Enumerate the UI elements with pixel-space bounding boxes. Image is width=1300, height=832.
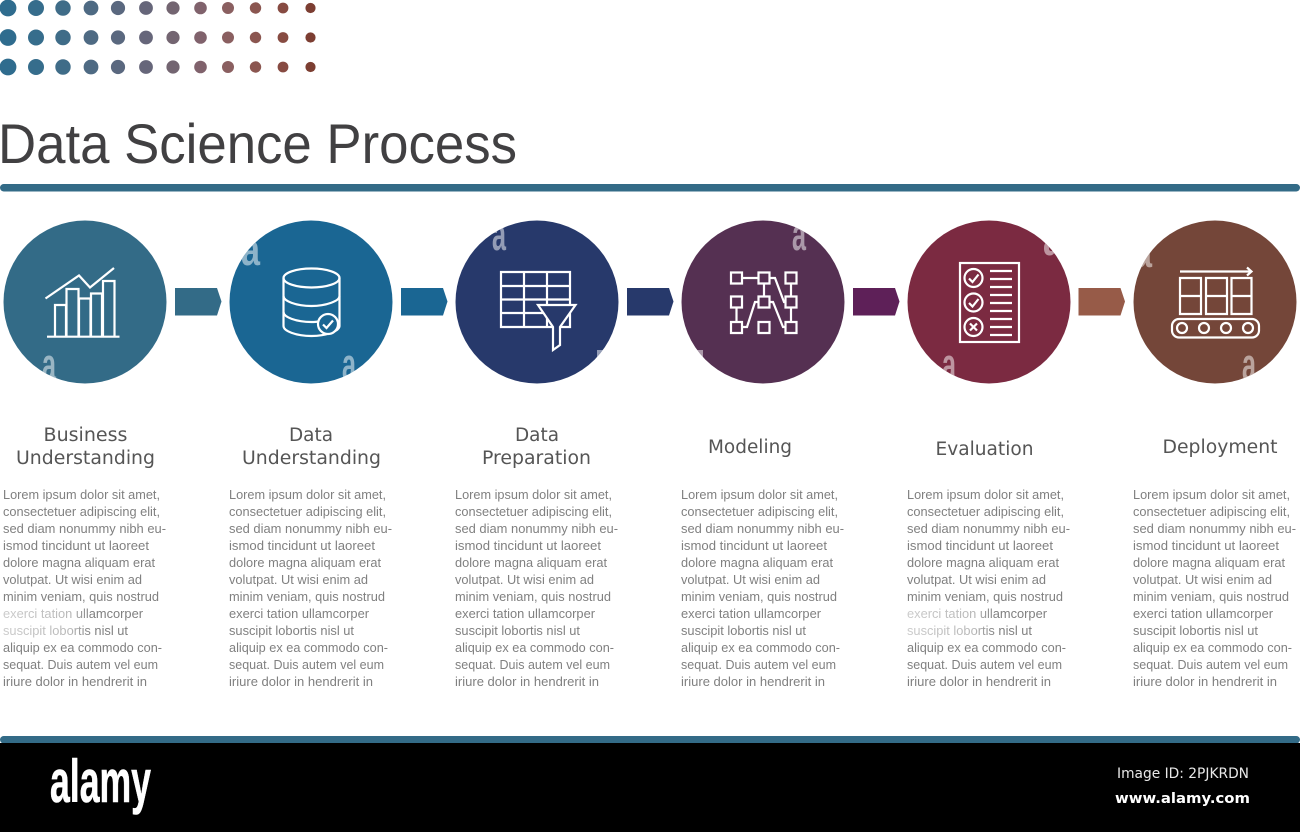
text block: Data Understanding: ismod tincidunt ut laoreet bbox=[229, 538, 375, 553]
text block: Data Understanding: suscipit lobortis nisl ut bbox=[229, 623, 354, 638]
icon: node graph bbox=[731, 272, 796, 333]
text block: Deployment: Lorem ipsum dolor sit amet, bbox=[1133, 487, 1290, 502]
text block: Deployment: exerci tation ullamcorper bbox=[1133, 606, 1274, 621]
text block: Business Understanding bbox=[3, 487, 166, 689]
text block: Deployment: sequat. Duis autem vel eum bbox=[1133, 657, 1288, 672]
text block: Evaluation: consectetuer adipiscing elit, bbox=[907, 504, 1064, 519]
text block: Data Understanding: consectetuer adipiscing elit, bbox=[229, 504, 386, 519]
heading: Business Understanding: Business bbox=[44, 425, 128, 446]
text block: Modeling bbox=[681, 487, 844, 689]
heading: Deployment: Deployment bbox=[1162, 437, 1278, 458]
step 2 circle with database icon bbox=[230, 220, 392, 390]
heading: Evaluation: Evaluation bbox=[936, 439, 1034, 460]
text block: Evaluation: sed diam nonummy nibh eu- bbox=[907, 521, 1070, 536]
step 6 circle with conveyor icon bbox=[1133, 220, 1296, 390]
heading: Data Preparation: Data bbox=[515, 425, 559, 446]
text block: Business Understanding: sequat. Duis autem vel eum bbox=[3, 657, 158, 672]
icon: table with funnel bbox=[501, 272, 576, 350]
text block: Data Preparation: minim veniam, quis nostrud bbox=[455, 589, 611, 604]
text block: Deployment: aliquip ex ea commodo con- bbox=[1133, 640, 1292, 655]
image id: Image ID: 2PJKRDN bbox=[1117, 766, 1249, 782]
arrow 4 bbox=[853, 288, 900, 316]
arrow 2 bbox=[401, 288, 448, 316]
step 5 circle with checklist icon: a bbox=[942, 339, 957, 390]
heading: Data Understanding bbox=[242, 425, 381, 469]
text block: Data Preparation: sequat. Duis autem vel eum bbox=[455, 657, 610, 672]
text block: Deployment bbox=[1133, 487, 1296, 689]
text block: Modeling: sequat. Duis autem vel eum bbox=[681, 657, 836, 672]
icon: bar chart with trend line bbox=[46, 268, 120, 337]
text block: Data Preparation: dolore magna aliquam erat bbox=[455, 555, 607, 570]
text block: Evaluation: ismod tincidunt ut laoreet bbox=[907, 538, 1053, 553]
text block: Data Preparation: Lorem ipsum dolor sit amet, bbox=[455, 487, 612, 502]
text block: Evaluation: dolore magna aliquam erat bbox=[907, 555, 1059, 570]
text block: Data Understanding bbox=[229, 487, 392, 689]
text block: Business Understanding: suscipit lobortis nisl ut bbox=[3, 623, 128, 638]
text block: Deployment: sed diam nonummy nibh eu- bbox=[1133, 521, 1296, 536]
icon: checklist bbox=[960, 263, 1019, 342]
text block: Evaluation bbox=[907, 487, 1070, 689]
text block: Business Understanding: consectetuer adipiscing elit, bbox=[3, 504, 160, 519]
heading: Business Understanding: Understanding bbox=[16, 448, 155, 469]
text block: Business Understanding: sed diam nonummy nibh eu- bbox=[3, 521, 166, 536]
text block: Data Understanding: dolore magna aliquam erat bbox=[229, 555, 381, 570]
arrow 1 bbox=[175, 288, 222, 316]
text block: Deployment: suscipit lobortis nisl ut bbox=[1133, 623, 1258, 638]
text block: Evaluation: aliquip ex ea commodo con- bbox=[907, 640, 1066, 655]
text block: Data Preparation: ismod tincidunt ut laoreet bbox=[455, 538, 601, 553]
text block: Modeling: sed diam nonummy nibh eu- bbox=[681, 521, 844, 536]
arrow 3 bbox=[627, 288, 674, 316]
step 2 circle with database icon: a bbox=[342, 339, 357, 390]
step 3 circle with table filter icon: a bbox=[492, 209, 507, 260]
text block: Deployment: ismod tincidunt ut laoreet bbox=[1133, 538, 1279, 553]
text block: Business Understanding: aliquip ex ea commodo con- bbox=[3, 640, 162, 655]
text block: Modeling: minim veniam, quis nostrud bbox=[681, 589, 837, 604]
step 5 circle with checklist icon bbox=[908, 214, 1070, 390]
heading: Data Understanding: Understanding bbox=[242, 448, 381, 469]
text block: Business Understanding: Lorem ipsum dolor sit amet, bbox=[3, 487, 160, 502]
heading: Business Understanding bbox=[16, 425, 155, 469]
text block: Data Preparation: iriure dolor in hendrerit in bbox=[455, 674, 599, 689]
text block: Data Understanding: aliquip ex ea commodo con- bbox=[229, 640, 388, 655]
text block: Data Preparation: consectetuer adipiscing elit, bbox=[455, 504, 612, 519]
text block: Data Preparation: sed diam nonummy nibh eu- bbox=[455, 521, 618, 536]
text block: Business Understanding: iriure dolor in hendrerit in bbox=[3, 674, 147, 689]
text block: Evaluation: minim veniam, quis nostrud bbox=[907, 589, 1063, 604]
step 6 circle with conveyor icon: a bbox=[1133, 226, 1153, 277]
text block: Business Understanding: minim veniam, quis nostrud bbox=[3, 589, 159, 604]
step 5 circle with checklist icon: a bbox=[1043, 214, 1063, 265]
text block: Deployment: volutpat. Ut wisi enim ad bbox=[1133, 572, 1272, 587]
text block: Modeling: ismod tincidunt ut laoreet bbox=[681, 538, 827, 553]
watermark fade over body text bbox=[2, 606, 996, 638]
text block: Data Preparation: suscipit lobortis nisl ut bbox=[455, 623, 580, 638]
text block: Evaluation: Lorem ipsum dolor sit amet, bbox=[907, 487, 1064, 502]
decorative dot grid bbox=[0, 0, 316, 75]
text block: Evaluation: iriure dolor in hendrerit in bbox=[907, 674, 1051, 689]
text block: Business Understanding: volutpat. Ut wisi enim ad bbox=[3, 572, 142, 587]
step 6 circle with conveyor icon: a bbox=[1242, 339, 1257, 390]
text block: Modeling: volutpat. Ut wisi enim ad bbox=[681, 572, 820, 587]
website: www.alamy.com bbox=[1115, 791, 1250, 807]
text block: Data Understanding: sed diam nonummy nibh eu- bbox=[229, 521, 392, 536]
text block: Data Preparation bbox=[455, 487, 618, 689]
text block: Modeling: exerci tation ullamcorper bbox=[681, 606, 822, 621]
heading: Data Preparation bbox=[482, 425, 591, 469]
arrow 5 bbox=[1078, 288, 1125, 316]
step 1 circle with chart icon bbox=[4, 220, 166, 390]
text block: Business Understanding: exerci tation ullamcorper bbox=[3, 606, 144, 621]
text block: Business Understanding: ismod tincidunt ut laoreet bbox=[3, 538, 149, 553]
text block: Data Preparation: aliquip ex ea commodo con- bbox=[455, 640, 614, 655]
text block: Data Understanding: exerci tation ullamcorper bbox=[229, 606, 370, 621]
text block: Data Preparation: exerci tation ullamcorper bbox=[455, 606, 596, 621]
text block: Data Understanding: sequat. Duis autem vel eum bbox=[229, 657, 384, 672]
text block: Modeling: suscipit lobortis nisl ut bbox=[681, 623, 806, 638]
title: Data Science Process bbox=[0, 112, 517, 175]
text block: Evaluation: exerci tation ullamcorper bbox=[907, 606, 1048, 621]
icon: database with check bbox=[284, 268, 340, 336]
heading: Data Understanding: Data bbox=[289, 425, 333, 446]
step 2 circle with database icon: a bbox=[241, 224, 261, 275]
step 4 circle with node graph icon bbox=[682, 209, 844, 384]
text block: Business Understanding: dolore magna aliquam erat bbox=[3, 555, 155, 570]
text block: Evaluation: suscipit lobortis nisl ut bbox=[907, 623, 1032, 638]
text block: Deployment: iriure dolor in hendrerit in bbox=[1133, 674, 1277, 689]
footer bar bbox=[0, 743, 1300, 832]
step 3 circle with table filter icon bbox=[456, 209, 618, 384]
text block: Data Understanding: minim veniam, quis nostrud bbox=[229, 589, 385, 604]
text block: Modeling: Lorem ipsum dolor sit amet, bbox=[681, 487, 838, 502]
footer logo: alamy bbox=[50, 748, 151, 815]
text block: Modeling: dolore magna aliquam erat bbox=[681, 555, 833, 570]
text block: Evaluation: volutpat. Ut wisi enim ad bbox=[907, 572, 1046, 587]
heading: Data Preparation: Preparation bbox=[482, 448, 591, 469]
text block: Evaluation: sequat. Duis autem vel eum bbox=[907, 657, 1062, 672]
text block: Modeling: consectetuer adipiscing elit, bbox=[681, 504, 838, 519]
text block: Modeling: aliquip ex ea commodo con- bbox=[681, 640, 840, 655]
text block: Deployment: consectetuer adipiscing elit, bbox=[1133, 504, 1290, 519]
text block: Deployment: minim veniam, quis nostrud bbox=[1133, 589, 1289, 604]
text block: Modeling: iriure dolor in hendrerit in bbox=[681, 674, 825, 689]
text block: Data Understanding: volutpat. Ut wisi enim ad bbox=[229, 572, 368, 587]
text block: Data Understanding: iriure dolor in hendrerit in bbox=[229, 674, 373, 689]
heading: Modeling: Modeling bbox=[708, 437, 792, 458]
top rule bbox=[0, 184, 1300, 192]
bottom rule bbox=[0, 736, 1300, 744]
text block: Data Understanding: Lorem ipsum dolor sit amet, bbox=[229, 487, 386, 502]
text block: Data Preparation: volutpat. Ut wisi enim ad bbox=[455, 572, 594, 587]
icon: conveyor belt bbox=[1172, 268, 1259, 338]
step 4 circle with node graph icon: a bbox=[792, 209, 807, 260]
step 1 circle with chart icon: a bbox=[42, 339, 57, 390]
text block: Deployment: dolore magna aliquam erat bbox=[1133, 555, 1285, 570]
